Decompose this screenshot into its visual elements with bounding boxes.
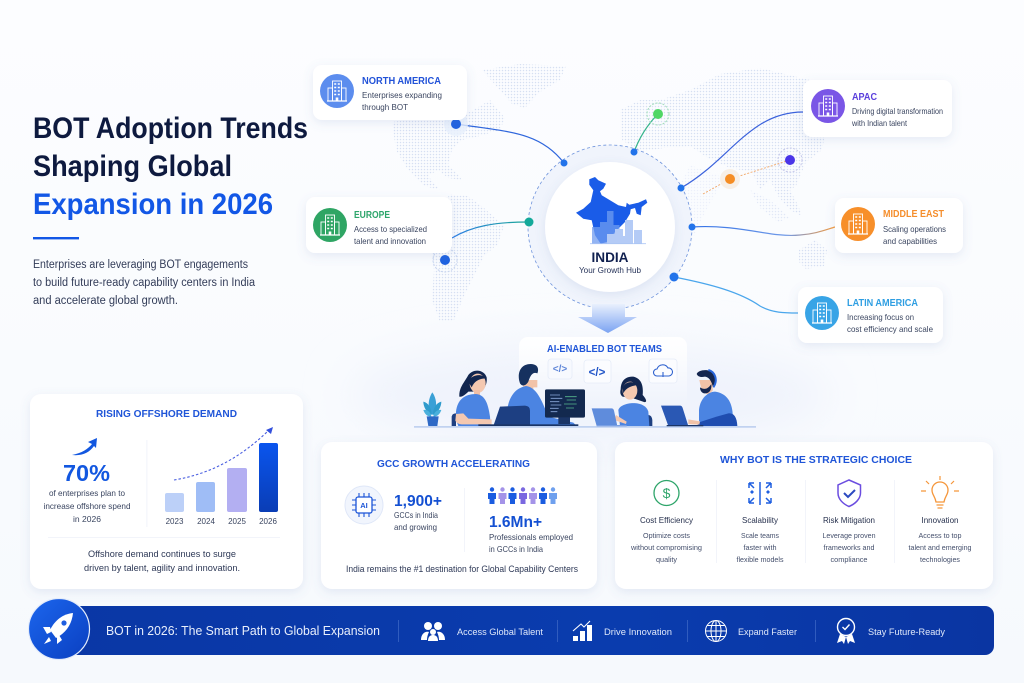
icon: people row: [488, 487, 557, 504]
column: cost efficiency: $: [663, 485, 671, 501]
AI-enabled team panel backdrop: [519, 337, 687, 407]
panel: rising offshore demand: [30, 394, 303, 589]
woman left: [452, 371, 492, 426]
illustration: team at table: [414, 364, 756, 427]
item: stay future-ready: [837, 618, 945, 644]
column: risk mitigation: frameworks and: [824, 543, 874, 552]
column: cost efficiency: [630, 480, 702, 564]
column: innovation: Innovation: [922, 515, 959, 525]
dotted world map: [392, 64, 827, 322]
icon chips: code and cloud: [548, 359, 677, 383]
stat description: increase offshore spend: [44, 501, 131, 511]
column: risk mitigation: compliance: [830, 555, 868, 564]
takeaway text: driven by talent, agility and innovation.: [84, 563, 240, 574]
table line: [414, 426, 756, 427]
column: innovation: Access to top: [918, 531, 962, 540]
item: expand faster: Expand Faster: [738, 627, 797, 637]
man with monitor: [506, 364, 577, 426]
card: APAC: APAC: [852, 91, 877, 103]
icon: India map: [576, 177, 647, 244]
arrow: hub to teams: [578, 304, 637, 333]
column: cost efficiency: quality: [656, 555, 677, 564]
column: scalability: Scale teams: [741, 531, 779, 540]
column: risk mitigation: Risk Mitigation: [823, 515, 875, 525]
panel: GCC growth accelerating: GCC GROWTH ACCELERATING: [377, 458, 530, 470]
card: Latin America: cost efficiency and scale: [847, 324, 933, 334]
panel: GCC growth accelerating: GCCs in India: [394, 510, 438, 520]
card: Europe: Access to specialized: [354, 224, 427, 234]
woman centre: [614, 377, 652, 426]
map location markers: [433, 103, 802, 272]
panel: why BOT is the strategic choice: [615, 442, 993, 589]
takeaway text: [84, 549, 240, 574]
item: expand faster: [706, 620, 797, 642]
card: Middle East: Scaling operations: [883, 224, 946, 234]
intro paragraph: [33, 259, 256, 307]
skyline: [590, 211, 646, 244]
plant: [423, 392, 441, 426]
footer banner: BOT in 2026: The Smart Path to Global Expansion: [106, 624, 380, 638]
panel: GCC growth accelerating: [321, 442, 597, 589]
card: Middle East: [835, 198, 963, 253]
icon: up arrow: [72, 438, 97, 455]
panel: why BOT is the strategic choice: WHY BOT IS THE STRATEGIC CHOICE: [720, 454, 912, 466]
column: cost efficiency: Optimize costs: [643, 531, 690, 540]
card: North America: Enterprises expanding: [362, 90, 442, 100]
item: access global talent: Access Global Talent: [457, 627, 543, 637]
column: scalability: faster with: [744, 543, 776, 552]
card: Middle East: and capabilities: [883, 236, 937, 246]
bar chart: 2026: [259, 517, 277, 526]
card: APAC: [803, 80, 952, 137]
takeaway text: Offshore demand continues to surge: [88, 549, 236, 560]
central hub: India: [528, 145, 692, 309]
column: scalability: flexible models: [736, 555, 784, 564]
card: Latin America: LATIN AMERICA: [847, 297, 918, 309]
dark laptop: [493, 406, 530, 426]
column: innovation: talent and emerging: [908, 543, 972, 552]
item: drive innovation: Drive Innovation: [604, 627, 672, 637]
panel: rising offshore demand: RISING OFFSHORE DEMAND: [96, 408, 237, 420]
panel: GCC growth accelerating: in GCCs in India: [489, 544, 543, 554]
card: Latin America: Increasing focus on: [847, 312, 914, 322]
stat: 70%: 70%: [63, 460, 110, 486]
stat: 1,900+: 1,900+: [394, 493, 442, 510]
laptop right: [661, 406, 688, 426]
title: Shaping Global: [33, 150, 232, 183]
stat description: in 2026: [73, 514, 101, 524]
footer banner: [28, 598, 994, 660]
man right with headset: [688, 370, 737, 426]
title: [33, 112, 308, 239]
card: APAC: Driving digital transformation: [852, 106, 943, 116]
column: cost efficiency: Cost Efficiency: [640, 515, 694, 525]
icon: rocket badge: [28, 598, 90, 660]
intro paragraph: Enterprises are leveraging BOT engagements: [33, 259, 248, 271]
connector lines: [452, 112, 835, 313]
laptop centre: [592, 408, 617, 426]
stat: 1.6Mn+: 1.6Mn+: [489, 514, 542, 531]
card: North America: [313, 65, 467, 120]
takeaway text: India remains the #1 destination for Global Capability Centers: [346, 564, 579, 574]
central hub: India: INDIA: [592, 249, 628, 265]
keyboard bar: [478, 424, 578, 426]
monitor: [545, 389, 585, 424]
icon chips: code and cloud: </>: [553, 364, 567, 375]
stat description: of enterprises plan to: [49, 488, 125, 498]
title: Expansion in 2026: [33, 188, 273, 221]
heading: AI-enabled BOT teams: AI-ENABLED BOT TEAMS: [547, 343, 662, 355]
bar chart: 2023: [166, 517, 184, 526]
column: innovation: technologies: [920, 555, 960, 564]
column: innovation: [908, 476, 972, 564]
card: Latin America: [798, 287, 943, 343]
item: drive innovation: [573, 621, 672, 641]
column: risk mitigation: Leverage proven: [822, 531, 876, 540]
card: Europe: talent and innovation: [354, 236, 426, 246]
bar chart: 2024: [197, 517, 215, 526]
icon chips: code and cloud: </>: [589, 367, 606, 379]
central hub: India: Your Growth Hub: [579, 265, 641, 275]
intro paragraph: and accelerate global growth.: [33, 295, 178, 307]
card: Middle East: MIDDLE EAST: [883, 208, 944, 220]
bar chart: [165, 427, 278, 526]
column: scalability: Scalability: [742, 515, 779, 525]
stat description: [44, 488, 131, 524]
card: North America: through BOT: [362, 102, 408, 112]
bar chart: 2025: [228, 517, 246, 526]
panel: GCC growth accelerating: Professionals employed: [489, 532, 573, 542]
column: cost efficiency: without compromising: [630, 543, 702, 552]
panel: GCC growth accelerating: and growing: [394, 522, 437, 532]
card: Europe: EUROPE: [354, 209, 390, 221]
card: North America: NORTH AMERICA: [362, 75, 441, 87]
item: access global talent: [421, 622, 543, 641]
item: stay future-ready: Stay Future-Ready: [868, 627, 945, 637]
title: BOT Adoption Trends: [33, 112, 308, 145]
icon: AI chip: AI: [360, 501, 368, 510]
card: Europe: [306, 197, 452, 253]
hub ring connector dots: [524, 148, 696, 282]
column: scalability: [736, 482, 784, 564]
icon: AI chip: [345, 486, 383, 524]
column: risk mitigation: [822, 480, 876, 564]
intro paragraph: to build future-ready capability centers in India: [33, 277, 256, 289]
card: APAC: with Indian talent: [851, 118, 908, 128]
